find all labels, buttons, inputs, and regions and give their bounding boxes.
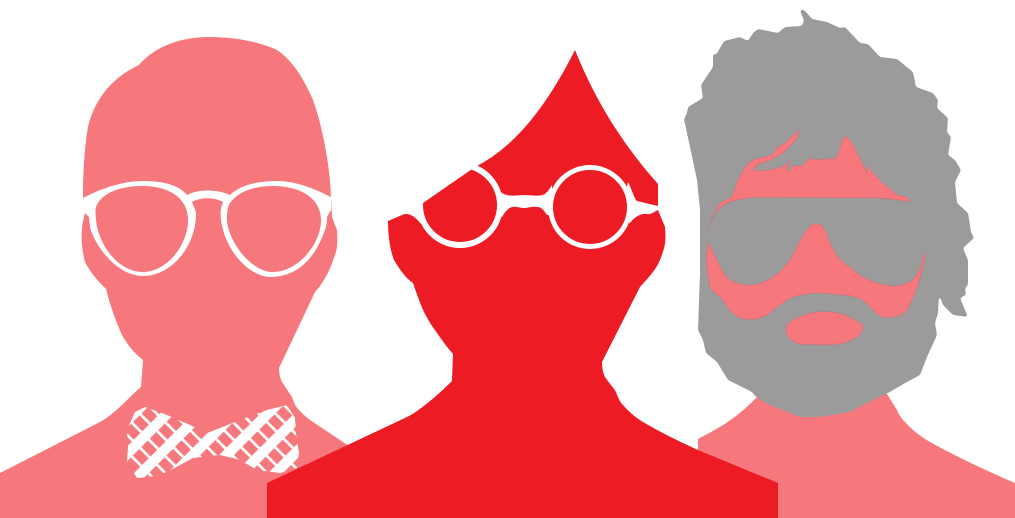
- face: mouth opening in beard: [786, 312, 863, 345]
- icon: plaid bow tie: [127, 405, 299, 478]
- icon: glasses temple arm: [626, 182, 660, 223]
- figure: left man with glasses and bow tie: [0, 37, 352, 518]
- face: cheeks and nose around sunglasses: [707, 223, 925, 319]
- silhouette: left man head and shoulders: [0, 37, 352, 518]
- face: forehead under the fringe: [708, 130, 910, 228]
- icon: round white glasses: [83, 181, 331, 277]
- silhouette: red woman with pointed hair: [267, 50, 778, 518]
- figure: centre woman with round glasses: [267, 50, 778, 518]
- silhouette: grey hair and beard: [684, 9, 974, 417]
- icon: glasses bridge: [497, 185, 552, 217]
- figure: right man with sunglasses and beard: [684, 9, 1015, 518]
- icon: right glasses lens ring: [550, 168, 630, 246]
- silhouette: right man shirt: [698, 394, 1015, 518]
- icon: left glasses lens ring: [420, 165, 500, 245]
